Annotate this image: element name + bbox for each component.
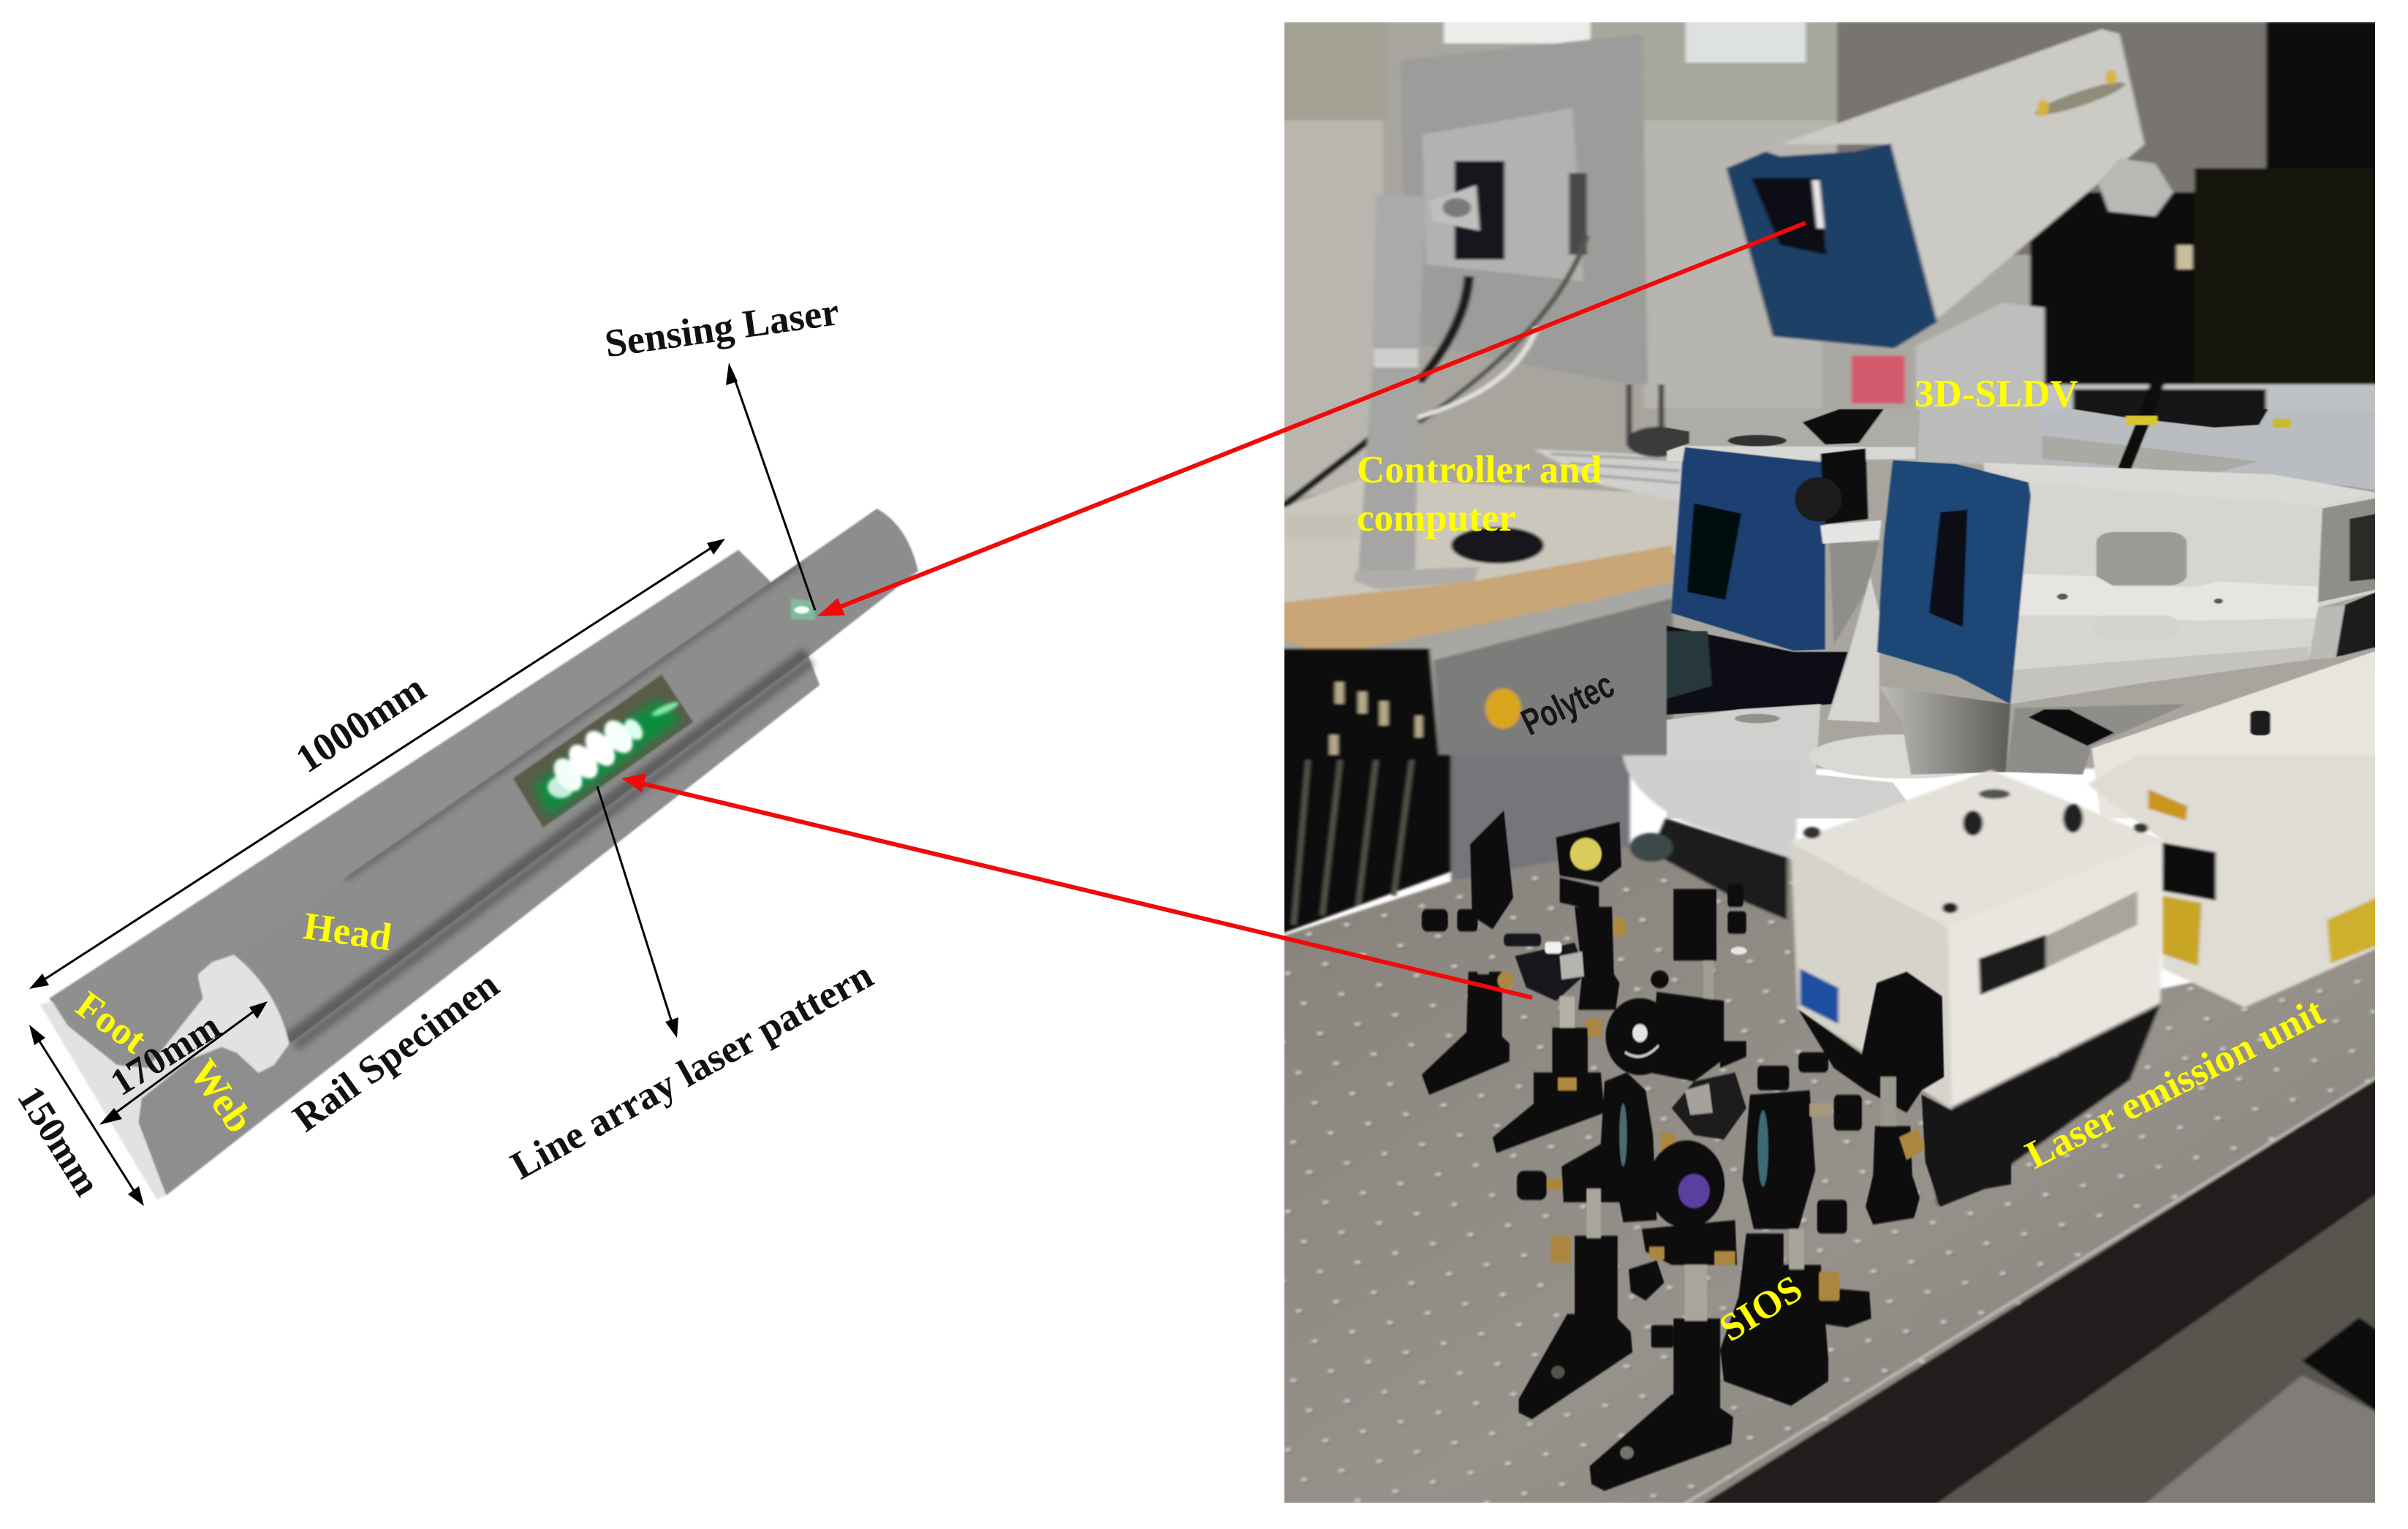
rail head bbox=[234, 509, 918, 1044]
label: 170mm: 170mm bbox=[103, 1005, 227, 1104]
label: Rail Specimen: Rail Specimen bbox=[285, 963, 507, 1140]
top scanning head bbox=[1780, 29, 2145, 322]
central post with purple lens bbox=[1589, 1140, 1737, 1491]
label: Controller and computer: computer bbox=[1357, 497, 1516, 539]
left tall post bbox=[1517, 1072, 1657, 1419]
upper photo scene: top scanning head, monitor, desk bbox=[1279, 22, 2380, 768]
rail cross-section end face bbox=[40, 955, 289, 1199]
central prism bbox=[1672, 1072, 1746, 1139]
monitor bbox=[1401, 34, 1648, 384]
post 2 with yellow lens bbox=[1556, 822, 1621, 1010]
label: 150mm: 150mm bbox=[9, 1079, 108, 1203]
mount with rotary wheel bbox=[1703, 960, 1714, 1003]
label: 3D-SLDV: 3D-SLDV bbox=[1915, 373, 2078, 415]
lower-left blue head bbox=[1671, 447, 1825, 650]
cable bbox=[2141, 382, 2166, 409]
label: SIOS: SIOS bbox=[1712, 1267, 1810, 1350]
post 1 bbox=[1422, 811, 1513, 1095]
label: Foot: Foot bbox=[68, 984, 154, 1062]
table mounting holes bbox=[1279, 847, 2380, 1516]
label: Head: Head bbox=[301, 905, 394, 959]
panel: laboratory photograph bbox=[1279, 22, 2380, 1516]
label: Controller and computer: Controller and bbox=[1357, 449, 1602, 491]
mirror mount bbox=[1515, 943, 1586, 1001]
optical mounts and posts bbox=[1422, 811, 2011, 1491]
right tall post bbox=[1720, 1052, 1871, 1405]
dimension arrow: 170mm bbox=[99, 1001, 268, 1125]
sensing laser spot bbox=[791, 599, 815, 620]
support column bbox=[1916, 303, 2045, 466]
laser emission box bbox=[1790, 770, 2162, 927]
laser line pattern on rail head bbox=[513, 675, 693, 827]
post by box bbox=[1798, 972, 1944, 1112]
rail foot lower flange bbox=[138, 650, 819, 1196]
middle photo scene: twin scanning heads and base bbox=[1667, 409, 2377, 819]
desk bbox=[1279, 478, 1684, 610]
panel: rail specimen drawing bbox=[40, 509, 918, 1199]
arrow: line array laser pattern bbox=[597, 786, 678, 1038]
red arrow: optics to laser pattern bbox=[621, 773, 1532, 998]
flight case bbox=[1432, 598, 1674, 756]
monitor stand bbox=[1358, 346, 1419, 574]
camera mount bbox=[1820, 449, 1868, 524]
Polytec logo text: Polytec bbox=[1515, 664, 1621, 743]
table front edge bbox=[1684, 1075, 2380, 1516]
label: Line array laser pattern: Line array laser pattern bbox=[504, 952, 880, 1188]
label: 1000mm: 1000mm bbox=[288, 666, 433, 781]
rail foot upper flange bbox=[49, 550, 776, 1068]
right blue head bbox=[1877, 460, 2031, 704]
label: Sensing Laser: Sensing Laser bbox=[602, 289, 841, 365]
dimension arrow: 150mm bbox=[29, 1025, 144, 1206]
arrow: sensing laser bbox=[726, 363, 815, 610]
seam shadow along lower flange bbox=[295, 662, 811, 1047]
rear laser box top bbox=[2091, 650, 2377, 819]
lower photo scene: optical table and boxes bbox=[1279, 755, 2380, 1516]
optical table surface bbox=[1279, 847, 2380, 1516]
post 3 bbox=[1560, 996, 1575, 1030]
column and arm bbox=[1830, 542, 1879, 644]
cables left of case bbox=[1284, 647, 1442, 757]
right head body bbox=[1983, 463, 2377, 704]
label: Laser emission unit: Laser emission unit bbox=[2018, 989, 2331, 1177]
second laser box bbox=[2087, 755, 2380, 1007]
red arrow: scanning head to sensing spot bbox=[817, 223, 1806, 616]
rotary base plate bbox=[1623, 755, 1801, 860]
base bbox=[1667, 704, 1920, 819]
dimension arrow: 1000mm bbox=[29, 539, 725, 989]
label: Web: Web bbox=[181, 1051, 262, 1141]
